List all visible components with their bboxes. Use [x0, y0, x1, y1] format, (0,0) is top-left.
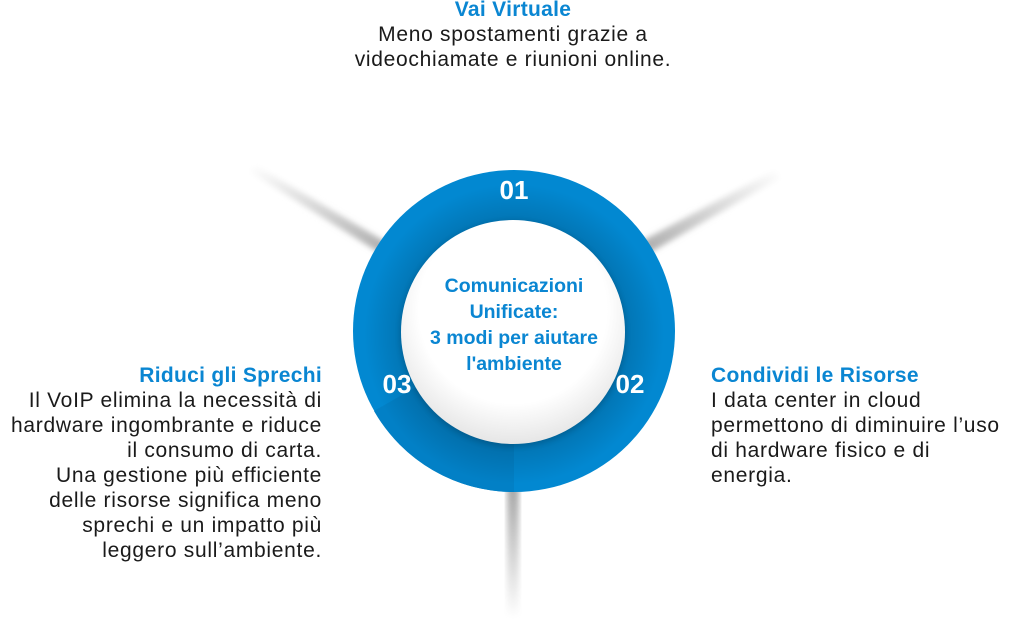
shadow line bottom: [507, 440, 519, 618]
text block: Vai Virtuale: [354, 0, 671, 71]
center title: Comunicazioni: [445, 275, 583, 297]
inner white circle: [400, 220, 626, 447]
text block: Riduci gli Sprechi: Una gestione più efficiente: [56, 464, 322, 487]
text block: Riduci gli Sprechi: [11, 364, 322, 562]
shadow line upper-right: [610, 170, 780, 270]
text block: Condividi le Risorse: permettono di diminuire l’uso: [711, 414, 1000, 437]
text block: Riduci gli Sprechi: leggero sull’ambiente.: [102, 539, 322, 562]
number 01: 01: [500, 175, 528, 205]
text block: Riduci gli Sprechi: Il VoIP elimina la necessità di: [29, 389, 322, 412]
text block: Condividi le Risorse: I data center in cloud: [711, 389, 921, 412]
text block: Vai Virtuale: videochiamate e riunioni online.: [355, 48, 671, 71]
center title: l'ambiente: [466, 353, 562, 375]
text block: Condividi le Risorse: energia.: [711, 464, 792, 487]
blue ring: [353, 170, 675, 492]
text block: Riduci gli Sprechi: Riduci gli Sprechi: [139, 364, 322, 387]
number 03: 03: [383, 369, 411, 399]
text block: Riduci gli Sprechi: hardware ingombrante e riduce: [11, 414, 322, 437]
center title: 3 modi per aiutare: [430, 327, 598, 349]
text block: Condividi le Risorse: [711, 364, 1000, 487]
text block: Riduci gli Sprechi: sprechi e un impatto più: [82, 514, 322, 537]
shadow line upper-left: [250, 165, 420, 272]
center title: [430, 275, 598, 375]
text block: Condividi le Risorse: di hardware fisico e di: [711, 439, 930, 462]
number 02: 02: [616, 369, 644, 399]
text block: Vai Virtuale: Meno spostamenti grazie a: [378, 23, 648, 46]
center title: Unificate:: [470, 301, 558, 323]
text block: Riduci gli Sprechi: il consumo di carta.: [127, 439, 322, 462]
text block: Condividi le Risorse: Condividi le Risorse: [711, 364, 919, 387]
text block: Riduci gli Sprechi: delle risorse significa meno: [49, 489, 322, 512]
